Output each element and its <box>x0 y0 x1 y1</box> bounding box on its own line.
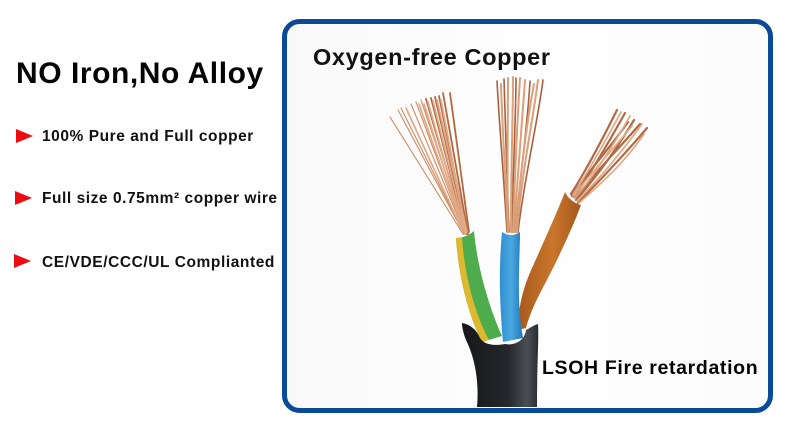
feature: certifications: CE/VDE/CCC/UL Complianted <box>42 254 275 271</box>
wire: brown insulation <box>518 192 581 330</box>
feature list <box>14 128 278 271</box>
cable: black outer jacket <box>462 323 538 407</box>
wire: blue insulation <box>500 232 523 342</box>
label: oxygen-free copper: Oxygen-free Copper <box>313 44 551 70</box>
copper strands: left wire <box>390 93 469 234</box>
heading: NO Iron,No Alloy <box>16 57 264 90</box>
copper strands: right wire <box>571 110 647 203</box>
copper strands: middle wire <box>497 77 543 232</box>
panel: cable photo <box>284 22 770 410</box>
feature: pure copper: 100% Pure and Full copper <box>42 128 254 145</box>
feature: wire size: Full size 0.75mm² copper wire <box>42 190 278 207</box>
wire: green-yellow insulation <box>456 231 502 342</box>
label: LSOH fire retardation: LSOH Fire retardation <box>542 357 758 379</box>
